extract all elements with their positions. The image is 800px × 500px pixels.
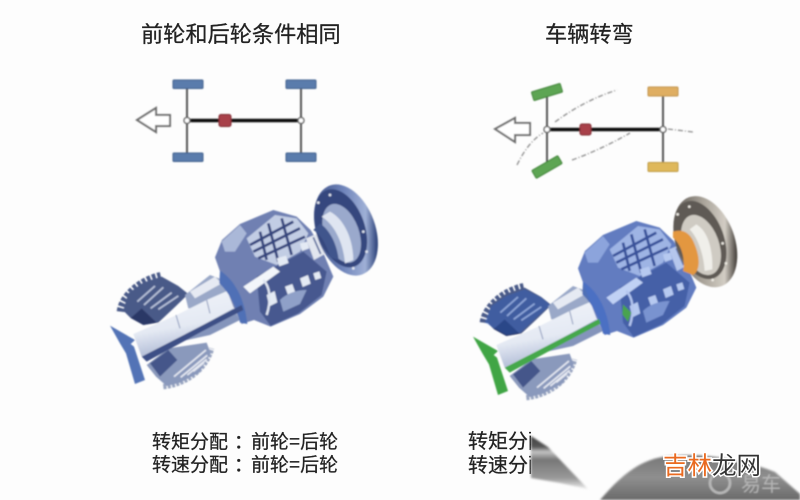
gears, shaft and housing — [484, 221, 698, 398]
front joint — [544, 126, 550, 132]
center differential — [580, 124, 591, 135]
rear joint — [298, 118, 304, 124]
watermark backdrop hill — [600, 455, 800, 500]
dark part: 龙网 — [712, 452, 761, 480]
arrow: turning direction — [495, 118, 530, 142]
caption: left panel — [152, 431, 338, 476]
blue tint on upper gear — [485, 289, 550, 335]
illustration: differential, turning — [473, 187, 749, 398]
torque distribution: 转矩分配 — [468, 430, 548, 453]
blue tint on housing — [578, 221, 696, 338]
watermark smudge covering caption — [531, 436, 588, 489]
front joint — [184, 118, 190, 124]
rear axle — [300, 84, 302, 157]
front axle — [186, 84, 188, 157]
dark shaft stripe — [142, 305, 243, 362]
green shaft stripe — [505, 319, 601, 373]
flange — [662, 187, 749, 296]
speed distribution: 转速分配 ：前轮=后轮 — [152, 454, 338, 476]
diagram: turning chassis — [495, 83, 693, 178]
drive shaft — [187, 119, 301, 122]
green inner gear mark — [622, 304, 631, 322]
front left wheel, steered — [531, 83, 563, 101]
flange — [302, 175, 390, 285]
rear joint — [660, 126, 666, 132]
arrow: driving direction — [137, 108, 170, 132]
heading: same conditions: 前轮和后轮条件相同 — [141, 22, 341, 47]
watermark: site name — [663, 452, 761, 480]
illustration: differential, blue — [110, 175, 390, 387]
rear axle — [662, 92, 664, 167]
rear right wheel — [286, 153, 316, 162]
rear left wheel — [648, 87, 678, 96]
heading: vehicle turning: 车辆转弯 — [545, 22, 634, 47]
logo text: 易车 — [741, 473, 781, 496]
watermark: yiche logo — [710, 473, 781, 496]
drive shaft — [547, 128, 663, 131]
orange part: 吉林 — [663, 452, 712, 480]
blue arrow on shaft end — [110, 326, 145, 384]
rear left wheel — [286, 80, 316, 88]
torque distribution: 转矩分配 ：前轮=后轮 — [152, 431, 338, 453]
logo ring — [710, 473, 730, 493]
front right wheel, steered — [532, 156, 562, 178]
green arrow on shaft end — [473, 337, 508, 395]
center differential — [219, 114, 231, 126]
front left wheel — [173, 80, 203, 88]
diagram: straight driving chassis — [137, 80, 316, 162]
front right wheel — [173, 153, 203, 162]
front axle — [546, 94, 548, 166]
speed distribution: 转速分配 — [468, 454, 548, 477]
rear right wheel — [648, 162, 678, 172]
turning path curves — [517, 90, 693, 165]
caption: right panel, partly covered — [468, 430, 531, 474]
gears, shaft and housing — [121, 210, 335, 387]
